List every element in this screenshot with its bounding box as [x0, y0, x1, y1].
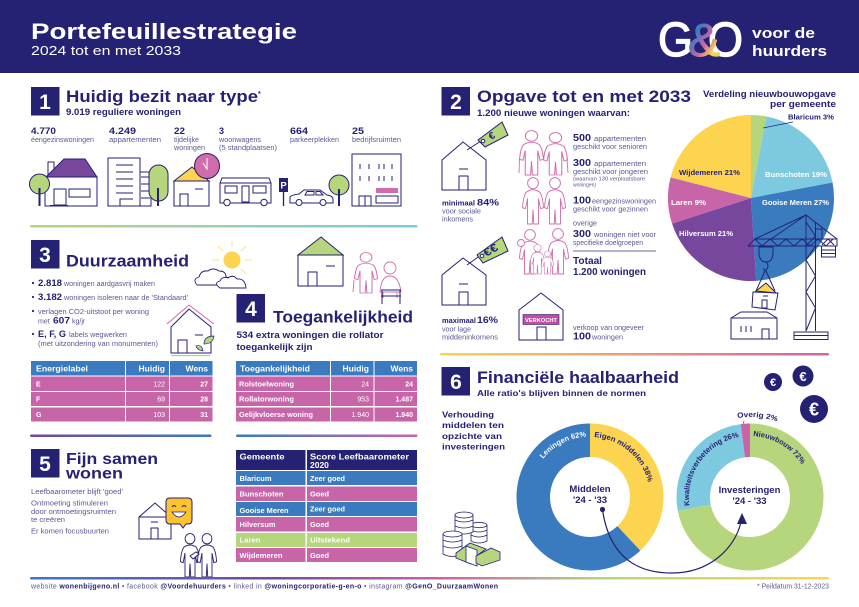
text: verhouding: opzichte van — [442, 431, 502, 441]
icon: office building — [352, 154, 401, 206]
text: sociale inkomens: 84% — [477, 198, 499, 208]
icon: sustainable house — [167, 305, 214, 356]
number badge 3 — [31, 240, 60, 268]
table: leefbaarometer: Goed — [310, 551, 329, 560]
number badge 4: 4 — [245, 298, 257, 321]
list: 100 gezinnen — [573, 196, 656, 214]
list: 300 jongeren: 300 — [573, 158, 591, 169]
text: sociale inkomens: voor sociale — [442, 208, 481, 216]
bullet list: woningen isoleren naar de 'Standaard' — [63, 295, 188, 302]
icon: senior couple — [519, 131, 568, 175]
stat: tijdelijke woningen: 22 — [174, 126, 185, 136]
text: verkoop: 100 — [573, 332, 591, 342]
pie chart: verdeling per gemeente: Bunschoten 19% — [765, 172, 828, 179]
donut chart: investeringen: Overig 2% — [738, 412, 778, 422]
number badge 5: 5 — [39, 453, 51, 476]
bullet list: verlagen CO2-uitstoot per woning — [38, 309, 149, 316]
text: verhouding: investeringen — [442, 442, 505, 452]
donut chart: investeringen — [676, 412, 824, 570]
pie chart: verdeling per gemeente: Blaricum 3% — [788, 114, 835, 122]
table: leefbaarometer: Uitstekend — [310, 536, 350, 544]
stat: tijdelijke woningen: tijdelijke — [174, 137, 199, 144]
bullet list: 607 — [53, 316, 70, 326]
number badge 2: 2 — [450, 91, 462, 114]
number badge 2 — [442, 87, 470, 116]
icon: accessible house — [298, 237, 343, 286]
donut chart: investeringen: '24 - '33 — [732, 496, 767, 507]
panel 1: huidig bezit naar type — [30, 87, 401, 206]
number badge 6 — [442, 367, 470, 396]
footer — [30, 577, 829, 590]
pie chart: verdeling per gemeente: Wijdemeren 21% — [679, 170, 741, 177]
table: toegankelijkheid: Toegankelijkheid — [240, 364, 310, 374]
text block 5: Er komen focusbuurten — [31, 528, 109, 536]
logo: G&O voor de huurders: huurders — [752, 43, 827, 60]
stat: tijdelijke woningen — [173, 126, 205, 152]
heading 2: Opgave tot en met 2033 — [477, 87, 691, 106]
table: toegankelijkheid: 953 — [357, 396, 369, 404]
table: leefbaarometer: Zeer goed — [310, 504, 345, 514]
number badge 6: 6 — [450, 371, 462, 394]
logo: G&O voor de huurders: & — [688, 14, 720, 66]
list: 300 overige: woningen niet voor — [593, 232, 657, 239]
stat: woonwagens — [218, 126, 277, 152]
table: energielabel: 103 — [153, 412, 165, 419]
table: energielabel: F — [36, 396, 41, 404]
divider 4 — [236, 434, 418, 437]
icon: house with two-euro tag: €€ — [482, 242, 500, 260]
donut chart: middelen: Middelen — [569, 484, 611, 495]
subheading 1: 9.019 reguliere woningen — [66, 107, 181, 117]
icon: temporary house with clock — [174, 154, 220, 206]
table: leefbaarometer: Zeer goed — [310, 474, 345, 483]
title: Portefeuillestrategie — [31, 19, 297, 44]
table: energielabel: G — [36, 412, 42, 419]
icon: euro coins: € — [770, 377, 776, 389]
table: toegankelijkheid: 1.487 — [395, 396, 413, 404]
subheading 2: 1.200 nieuwe woningen waarvan: — [477, 108, 630, 118]
table: toegankelijkheid: 24 — [361, 382, 369, 388]
number badge 4 — [236, 294, 265, 322]
pie heading: Verdeling nieuwbouwopgave — [703, 89, 836, 99]
icon: family with children — [518, 229, 568, 274]
table: toegankelijkheid: 1.940 — [351, 412, 369, 419]
icon: apartment block with tree — [108, 158, 168, 206]
heading 1: Huidig bezit naar type — [66, 87, 258, 106]
text: sociale inkomens — [442, 198, 499, 224]
stat: parkeerplekken — [290, 126, 339, 144]
list: 300 jongeren: geschikt voor jongeren — [573, 169, 648, 176]
total: 1.200 woningen — [573, 267, 646, 278]
heading 4: Toegankelijkheid — [273, 308, 413, 326]
table: toegankelijkheid — [236, 361, 417, 422]
text block 5: door ontmoetingsruimten — [31, 509, 116, 516]
list: 300 overige: specifieke doelgroepen — [573, 240, 643, 247]
table: leefbaarometer: Laren — [240, 536, 261, 544]
list: 300 jongeren: (waarvan 130 verplaatsbare — [573, 176, 645, 182]
footer contact line: website wonenbijgeno.nl • facebook @Voordehuurders • linked in @woningcorporatie-g-en-o • instagram @GenO_DuurzaamWonen — [30, 584, 498, 590]
panel 4: toegankelijkheid — [236, 237, 417, 422]
text: middeninkomens — [442, 315, 499, 342]
bullet list: 3.182 — [38, 292, 62, 302]
stat: parkeerplekken: parkeerplekken — [290, 137, 339, 144]
icon: house with smiling speech bubble — [139, 498, 192, 539]
number badge 5 — [31, 449, 60, 478]
donut chart: middelen: '24 - '33 — [573, 495, 607, 506]
list: 100 gezinnen: geschikt voor gezinnen — [573, 206, 648, 214]
table: toegankelijkheid: 24 — [405, 382, 413, 388]
table: toegankelijkheid: Rolstoelwoning — [239, 382, 294, 388]
stat: parkeerplekken: 664 — [290, 126, 308, 136]
stat: tijdelijke woningen: woningen — [173, 145, 205, 152]
bullet list: labels wegwerken — [69, 332, 127, 339]
stat: eengezinswoningen: 4.770 — [31, 126, 56, 136]
table: leefbaarometer: Blaricum — [240, 474, 272, 483]
icon: house with one-euro tag — [442, 122, 508, 190]
table: energielabel: 31 — [200, 412, 208, 419]
table: leefbaarometer: Goed — [310, 520, 329, 529]
arrow: middelen to investeringen — [600, 507, 747, 573]
table: energielabel: 28 — [200, 396, 208, 404]
donut chart: middelen: Eigen middelen 38% — [594, 432, 653, 482]
list: 500 senioren: appartementen — [594, 136, 646, 143]
icon: car with tree — [290, 175, 349, 206]
text: verkoop: woningen — [591, 334, 623, 342]
icon: seniors with walker — [353, 253, 401, 304]
donut chart: investeringen: Kwaliteitsverbetering 26% — [684, 432, 738, 506]
table: energielabel: 69 — [157, 396, 165, 404]
bullet list: met — [38, 318, 50, 326]
stat: woonwagens: 3 — [219, 126, 224, 136]
footnote: * Peildatum 31-12-2023 — [757, 584, 829, 590]
text block 5: Leefbaarometer blijft 'goed' — [31, 489, 123, 496]
text: middeninkomens: 16% — [477, 315, 498, 325]
table: leefbaarometer: Score Leefbaarometer — [310, 452, 410, 462]
text block 5: Ontmoeting stimuleren — [31, 500, 108, 508]
icon: parking sign — [279, 178, 288, 206]
list: 300 overige: 300 — [573, 229, 591, 240]
icon: coins and banknotes — [443, 512, 500, 566]
text: sociale inkomens: minimaal — [442, 200, 475, 208]
table: leefbaarometer: Gemeente — [240, 452, 285, 462]
table: leefbaarometer: Wijdemeren — [240, 551, 283, 560]
list: 300 jongeren — [573, 158, 648, 188]
table: leefbaarometer: 2020 — [310, 460, 329, 470]
divider 1 — [30, 225, 418, 228]
table: energielabel: Huidig — [139, 364, 165, 374]
table: toegankelijkheid: Wens — [390, 364, 413, 374]
divider 3 — [30, 434, 212, 437]
heading 3: Duurzaamheid — [66, 252, 189, 270]
icon: sold house: VERKOCHT — [525, 318, 558, 324]
text block 5 — [31, 489, 123, 536]
list: 500 senioren — [573, 133, 647, 151]
icon: parking sign: P — [280, 180, 287, 192]
stat: appartementen: 4.249 — [109, 126, 136, 136]
table: toegankelijkheid: Rollatorwoning — [239, 396, 294, 404]
pie chart: verdeling per gemeente — [668, 114, 835, 281]
stat: eengezinswoningen: éengezinswoningen — [31, 137, 94, 144]
stat: woonwagens: (5 standplaatsen) — [219, 145, 277, 152]
text: verkoop — [573, 325, 645, 342]
text: middeninkomens: middeninkomens — [442, 334, 499, 342]
table: toegankelijkheid: Huidig — [343, 364, 369, 374]
table: leefbaarometer: Bunschoten — [240, 490, 284, 498]
table: energielabel: 122 — [153, 382, 165, 388]
list: 100 gezinnen: eengezinswoningen — [592, 198, 656, 206]
subtitle: 2024 tot en met 2033 — [31, 43, 181, 58]
table: leefbaarometer: Gooise Meren — [240, 506, 289, 515]
donut chart: middelen: Leningen 62% — [540, 432, 586, 458]
number badge 1 — [31, 87, 60, 116]
panel 3: duurzaamheid — [31, 240, 252, 422]
icon: caravan — [220, 178, 271, 206]
text block 5: te creëren — [31, 517, 65, 524]
table: leefbaarometer: Hilversum — [240, 520, 276, 529]
subheading 4: toegankelijk zijn — [236, 342, 312, 352]
bullet list: 2.818 — [38, 278, 62, 288]
subheading 6: Alle ratio's blijven binnen de normen — [477, 388, 646, 398]
icon: two people — [180, 534, 217, 577]
table: leefbaarometer: Goed — [310, 490, 329, 498]
donut chart: investeringen: Nieuwbouw 72% — [754, 430, 806, 464]
subheading 4: 534 extra woningen die rollator — [236, 330, 384, 340]
list: 300 overige: overige — [573, 220, 597, 228]
heading 5 — [65, 451, 158, 482]
list: 500 senioren: 500 — [573, 133, 591, 144]
total — [573, 256, 646, 278]
heading 5: wonen — [65, 466, 123, 482]
icon: house with two-euro tag — [442, 237, 508, 305]
text: verhouding: Verhouding — [442, 410, 494, 420]
table: energielabel — [31, 361, 212, 422]
pie heading — [703, 89, 836, 109]
table: leefbaarometer — [236, 450, 417, 562]
table: energielabel: 27 — [200, 382, 208, 388]
header band — [0, 0, 859, 73]
icon: construction crane — [731, 215, 837, 340]
divider 2 — [440, 353, 829, 356]
icon: euro coins: € — [809, 400, 819, 420]
list: 500 senioren: geschikt voor senioren — [573, 144, 647, 151]
heading 5: Fijn samen — [66, 451, 158, 468]
table: energielabel: Energielabel — [36, 364, 88, 374]
stat: eengezinswoningen — [31, 126, 94, 144]
list: 100 gezinnen: 100 — [573, 196, 591, 206]
text: verhouding — [442, 410, 505, 452]
donut chart: investeringen: Investeringen — [719, 485, 781, 496]
text: sociale inkomens: inkomens — [442, 216, 474, 224]
icon: young couple — [522, 178, 566, 224]
logo: G&O voor de huurders: voor de — [752, 25, 815, 42]
stat: appartementen — [109, 126, 161, 144]
bullet list: (met uitzondering van monumenten) — [38, 341, 158, 348]
stat: bedrijfsruimten: bedrijfsruimten — [352, 137, 401, 144]
pie chart: verdeling per gemeente: Gooise Meren 27% — [762, 200, 830, 207]
table: energielabel: Wens — [185, 364, 208, 374]
donut chart: middelen — [516, 424, 664, 570]
panel 6: financiele haalbaarheid — [442, 366, 828, 574]
bullet list: woningen aardgasvrij maken — [63, 281, 155, 288]
text: middeninkomens: maximaal — [442, 318, 476, 325]
logo: G&O voor de huurders: G — [658, 14, 693, 67]
total: Totaal — [573, 256, 602, 267]
icon: house with tree — [30, 159, 97, 206]
pie chart: verdeling per gemeente: Hilversum 21% — [679, 231, 734, 238]
icon: euro coins: € — [799, 369, 807, 384]
stat: bedrijfsruimten — [352, 126, 401, 144]
number badge 3: 3 — [39, 244, 51, 267]
panel 2: opgave tot en met 2033 — [442, 87, 837, 342]
panel 5: fijn samen wonen — [31, 449, 417, 577]
icon: euro coins — [764, 366, 828, 423]
table: energielabel: E — [36, 382, 41, 388]
list: 300 jongeren: woningen) — [573, 182, 596, 188]
logo: G&O voor de huurders — [658, 14, 827, 67]
pie heading: per gemeente — [770, 99, 836, 109]
stat: appartementen: appartementen — [109, 137, 161, 144]
logo: G&O voor de huurders: O — [708, 14, 743, 67]
bullet list: E, F, G — [38, 329, 66, 339]
text: verkoop: verkoop van ongeveer — [573, 325, 645, 332]
icon: house with one-euro tag: € — [487, 130, 498, 143]
pie chart: verdeling per gemeente: Laren 9% — [671, 200, 707, 207]
stat: bedrijfsruimten: 25 — [352, 126, 364, 136]
table: toegankelijkheid: Gelijkvloerse woning — [239, 412, 313, 419]
table: toegankelijkheid: 1.940 — [395, 412, 413, 419]
bullet list: kg/jr — [72, 318, 86, 326]
icon: sold house — [519, 293, 563, 340]
text: middeninkomens: voor lage — [442, 326, 471, 334]
number badge 1: 1 — [39, 91, 51, 114]
stat: woonwagens: woonwagens — [218, 137, 262, 144]
list: 300 overige — [573, 220, 657, 247]
subheading 4 — [236, 330, 384, 352]
list: 300 jongeren: appartementen — [594, 161, 646, 168]
bullet list — [32, 278, 188, 348]
icon: sun and clouds — [195, 241, 252, 288]
footnote asterisk: * — [258, 91, 261, 98]
text: verhouding: middelen ten — [442, 420, 504, 430]
heading 6: Financiële haalbaarheid — [477, 368, 679, 387]
